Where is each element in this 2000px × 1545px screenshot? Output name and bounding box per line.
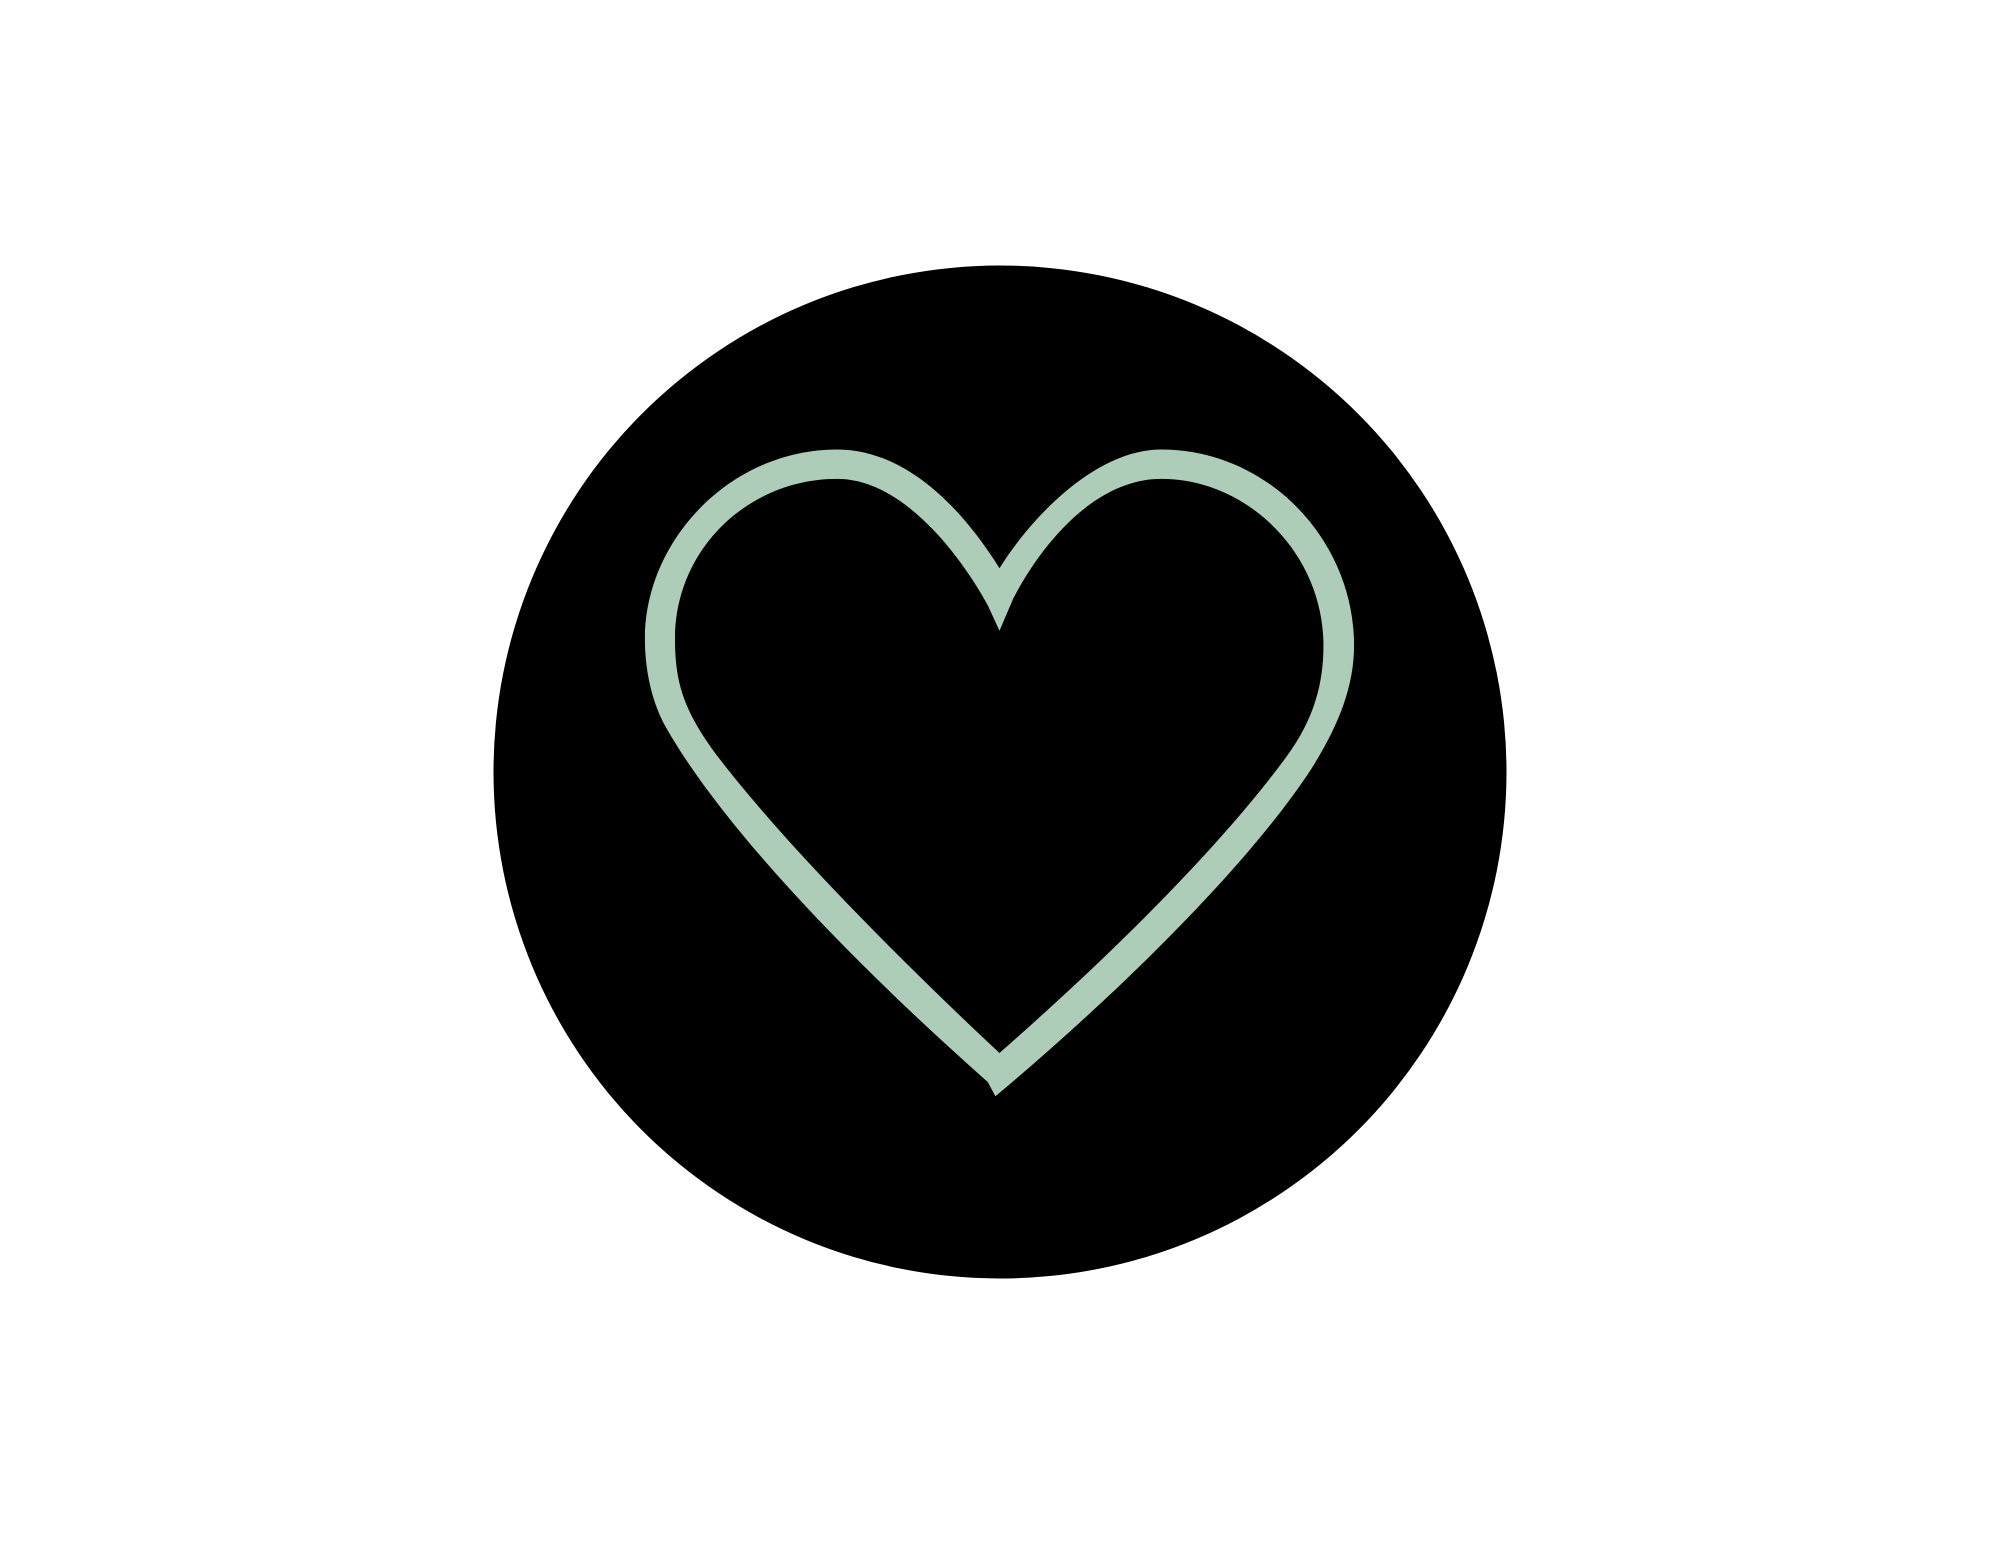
- black circle: [494, 266, 1506, 1278]
- heart outline: [645, 449, 1354, 1096]
